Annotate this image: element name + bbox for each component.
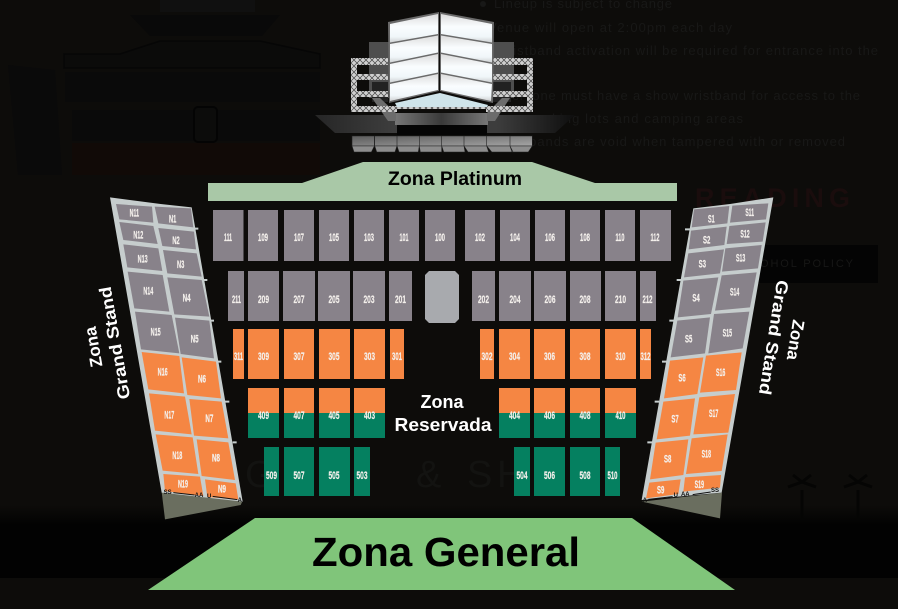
label: left zona grand stand: Zona [81, 325, 106, 369]
N2 [158, 228, 196, 249]
N8 [197, 439, 235, 480]
N15: N15 [151, 327, 161, 339]
section 109 [248, 210, 278, 261]
section 403 [354, 388, 385, 438]
section 405: 405 [328, 410, 340, 422]
section 209 [248, 271, 279, 321]
section 309: 309 [258, 351, 269, 363]
N12 [119, 222, 158, 244]
N5 [175, 318, 214, 358]
N2: N2 [172, 235, 180, 247]
S8 [650, 439, 688, 479]
section 212: 212 [642, 294, 652, 306]
S2 [689, 227, 727, 249]
section 312: 312 [640, 351, 650, 363]
ghost background notes: Wristband activation will be required for entrance into the [495, 43, 878, 58]
panel: zona general [148, 518, 735, 590]
section 211 [228, 271, 244, 321]
section 112: 112 [650, 232, 660, 244]
section 203 [353, 271, 385, 321]
section 306: 306 [544, 351, 555, 363]
S15 [708, 312, 749, 353]
N11 [116, 204, 153, 223]
N1: N1 [169, 213, 176, 225]
section 510: 510 [608, 470, 618, 482]
ground silhouette with palms [0, 475, 898, 578]
section 204: 204 [510, 294, 521, 306]
section 306 [534, 329, 565, 379]
label: zona reservada: Zona [420, 392, 464, 412]
section 303 [354, 329, 385, 379]
panel: right grand stand [642, 197, 773, 518]
section 404 [499, 388, 530, 438]
N16 [142, 352, 184, 393]
section 503: 503 [356, 470, 368, 482]
section 109: 109 [258, 232, 268, 244]
N8: N8 [212, 452, 220, 464]
right truss [486, 58, 533, 112]
N3 [163, 250, 202, 277]
S2: S2 [703, 234, 710, 246]
section 104: 104 [510, 232, 520, 244]
label: right zona grand stand: Grand Stand [755, 279, 792, 396]
section 106: 106 [545, 232, 555, 244]
section 204 [499, 271, 531, 321]
ghost heading: reading: READING [695, 183, 850, 213]
row 200 sections [228, 271, 656, 321]
section 305 [319, 329, 350, 379]
section 405 [319, 388, 350, 438]
section 206: 206 [544, 294, 556, 306]
S13 [722, 245, 762, 272]
right screen [440, 12, 494, 103]
section 508 [570, 447, 600, 496]
section 504: 504 [516, 470, 528, 482]
section 105: 105 [329, 232, 339, 244]
section 312 [640, 329, 651, 379]
section 303: 303 [364, 351, 375, 363]
S9 [646, 479, 681, 498]
ghost background notes: Everyone must have a show wristband for access to the [495, 88, 860, 103]
platform [315, 115, 575, 133]
ghost background notes: Wristbands are void when tampered with or removed [495, 134, 845, 149]
S5: S5 [685, 333, 692, 345]
section 309 [248, 329, 279, 379]
section 208: 208 [580, 294, 590, 306]
section 406: 406 [544, 410, 555, 422]
row letters: U [207, 494, 211, 500]
S12 [727, 222, 766, 244]
S18: S18 [702, 448, 711, 460]
label: zona reservada [394, 392, 493, 435]
stand base shadow [162, 492, 243, 519]
label: left zona grand stand: Grand Stand [96, 285, 134, 401]
N3: N3 [177, 259, 184, 271]
row 300 sections [233, 329, 651, 379]
row 400 sections [248, 388, 636, 438]
section 112 [640, 210, 671, 261]
N11: N11 [130, 208, 139, 220]
S19: S19 [695, 479, 704, 491]
N4 [167, 277, 209, 317]
N12: N12 [133, 229, 143, 241]
N9: N9 [218, 483, 226, 495]
S4 [678, 277, 718, 317]
stage back boxes [369, 42, 514, 102]
N1 [155, 207, 193, 227]
section 409 [248, 388, 279, 438]
S16 [700, 352, 742, 393]
S3: S3 [699, 258, 706, 270]
N14 [128, 272, 169, 312]
S13: S13 [736, 253, 745, 265]
N14: N14 [143, 286, 154, 298]
section 304 [499, 329, 530, 379]
ghost background map [8, 0, 320, 175]
ghost background notes: parking lots and camping areas [530, 111, 744, 126]
section 404: 404 [509, 410, 521, 422]
row letters: SS [711, 488, 719, 494]
N6: N6 [198, 374, 206, 386]
stand frame [642, 197, 773, 500]
section 210 [605, 271, 636, 321]
N13 [123, 244, 162, 271]
N18: N18 [172, 450, 182, 462]
section 307: 307 [294, 351, 304, 363]
label: left zona grand stand [81, 285, 134, 401]
N17 [149, 393, 192, 434]
N7 [189, 399, 228, 438]
N18 [156, 434, 198, 474]
section 408 [570, 388, 600, 438]
section 507 [284, 447, 314, 496]
section 106 [535, 210, 565, 261]
N6 [182, 357, 221, 398]
stand base shadow [642, 493, 722, 518]
ghost text: date and show: G&SH [245, 454, 524, 496]
section 310: 310 [616, 351, 626, 363]
S17: S17 [709, 408, 718, 420]
section 210: 210 [615, 294, 626, 306]
row letters: AA [195, 493, 204, 499]
row letters: SS [164, 490, 172, 496]
section 107 [284, 210, 314, 261]
N4: N4 [183, 292, 191, 304]
section 507: 507 [294, 470, 304, 482]
section 509 [264, 447, 279, 496]
S17 [693, 394, 735, 434]
stage floor wedge [395, 93, 488, 109]
section 110: 110 [616, 232, 624, 244]
S6: S6 [678, 373, 686, 385]
section 305: 305 [328, 351, 340, 363]
section 205: 205 [328, 294, 340, 306]
section 102 [465, 210, 495, 261]
left truss [351, 58, 397, 112]
section 205 [318, 271, 350, 321]
section 504 [514, 447, 530, 496]
section 304: 304 [509, 351, 521, 363]
row letters: A [238, 498, 243, 504]
S16: S16 [716, 367, 725, 379]
section 311 [233, 329, 244, 379]
section 308: 308 [580, 351, 590, 363]
section 302 [480, 329, 494, 379]
section 510 [605, 447, 620, 496]
section 107: 107 [294, 232, 304, 244]
section 407: 407 [294, 410, 304, 422]
section 108: 108 [580, 232, 590, 244]
N13: N13 [138, 253, 148, 265]
section 301 [390, 329, 404, 379]
label: right zona grand stand: Zona [783, 318, 808, 362]
section 506 [534, 447, 565, 496]
S19 [683, 475, 721, 492]
row letters [643, 488, 719, 504]
section 409: 409 [258, 410, 269, 422]
section 505 [319, 447, 350, 496]
section 410 [605, 388, 636, 438]
S7: S7 [671, 414, 679, 426]
section 105 [319, 210, 349, 261]
section 307 [284, 329, 314, 379]
section 111: 111 [224, 232, 232, 244]
section 103: 103 [364, 232, 374, 244]
section 207 [283, 271, 315, 321]
section 100 [425, 210, 455, 261]
ghost button: alcohol policy: ALCOHOL POLICY [733, 258, 854, 270]
section 407 [284, 388, 314, 438]
S14 [715, 272, 757, 311]
S8: S8 [664, 454, 671, 466]
section 208 [570, 271, 601, 321]
section 111 [213, 210, 244, 261]
section 509: 509 [266, 470, 277, 482]
centre tower [425, 271, 459, 323]
row letters: A [643, 498, 648, 504]
row letters: U [674, 493, 678, 499]
section 211: 211 [232, 294, 241, 306]
N15 [135, 312, 179, 353]
S9: S9 [657, 484, 664, 496]
S7 [657, 398, 695, 439]
section 100: 100 [435, 232, 445, 244]
row 500 sections [264, 447, 620, 496]
S12: S12 [740, 228, 750, 240]
left screen [388, 12, 439, 103]
label: right zona grand stand [755, 279, 808, 396]
row 100 sections [213, 210, 671, 261]
section 101 [389, 210, 419, 261]
section 103 [354, 210, 384, 261]
S11 [730, 203, 768, 223]
section 406 [534, 388, 565, 438]
ghost background notes [480, 0, 878, 149]
N19 [163, 474, 203, 496]
panel: zona platinum [208, 162, 677, 201]
S18 [686, 434, 728, 474]
N9 [205, 479, 238, 499]
section 209: 209 [258, 294, 269, 306]
S1: S1 [708, 213, 715, 225]
N7: N7 [205, 413, 213, 425]
section 203: 203 [364, 294, 374, 306]
section 101: 101 [400, 232, 408, 244]
N5: N5 [191, 333, 199, 345]
section 201 [389, 271, 412, 321]
ghost background notes: Venue will open at 2:00pm each day [488, 20, 732, 35]
section 108 [570, 210, 600, 261]
platform centre [372, 98, 510, 135]
section 302: 302 [482, 351, 492, 363]
section 311: 311 [234, 351, 243, 363]
section 102: 102 [475, 232, 485, 244]
S14: S14 [730, 287, 740, 299]
section 410: 410 [616, 410, 626, 422]
stage [315, 12, 575, 152]
S3 [684, 249, 724, 277]
label: zona general: Zona General [312, 529, 580, 575]
row letters [164, 490, 243, 504]
row letters: AA [681, 492, 690, 498]
S4: S4 [692, 292, 700, 304]
N16: N16 [158, 367, 168, 379]
section 202: 202 [478, 294, 489, 306]
section 110 [605, 210, 635, 261]
label: zona platinum: Zona Platinum [388, 169, 522, 190]
section 408: 408 [580, 410, 590, 422]
front barrier [352, 136, 532, 152]
panel: left grand stand [110, 197, 243, 519]
S11: S11 [745, 207, 754, 219]
section 212 [640, 271, 656, 321]
section 508: 508 [580, 470, 590, 482]
section 201: 201 [395, 294, 406, 306]
section 403: 403 [364, 410, 375, 422]
section 506: 506 [544, 470, 555, 482]
section 505: 505 [328, 470, 340, 482]
N19: N19 [178, 478, 188, 490]
section 310 [605, 329, 636, 379]
section 202 [472, 271, 495, 321]
section 308 [570, 329, 600, 379]
section 206 [534, 271, 566, 321]
N17: N17 [164, 409, 174, 421]
S15: S15 [723, 327, 732, 339]
S1 [692, 206, 729, 227]
stand frame [110, 197, 243, 502]
label: zona reservada: Reservada [394, 415, 493, 435]
S5 [671, 317, 710, 357]
section 503 [354, 447, 370, 496]
ghost button: alcohol policy [733, 245, 878, 283]
section 301: 301 [392, 351, 402, 363]
section 104 [500, 210, 530, 261]
section 207: 207 [294, 294, 304, 306]
S6 [664, 357, 703, 398]
